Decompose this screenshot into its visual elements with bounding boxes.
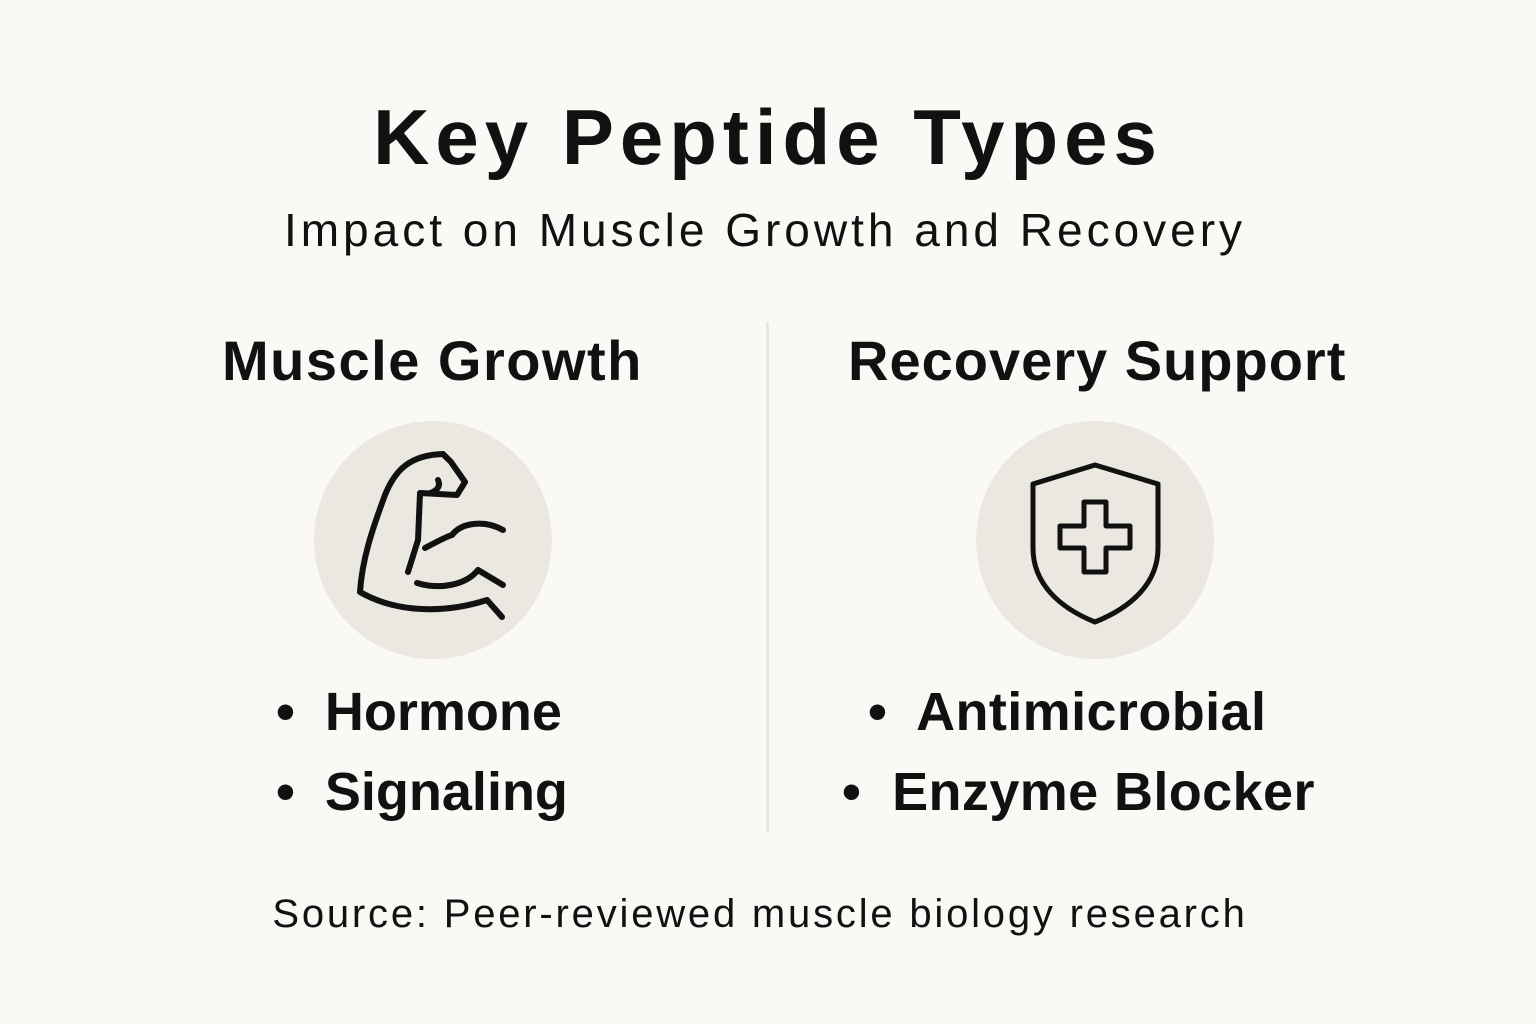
heading: muscle growth: Muscle Growth bbox=[222, 329, 643, 392]
list: muscle growth: • Hormone bbox=[276, 682, 562, 742]
divider bbox=[766, 322, 769, 832]
list: recovery bbox=[842, 682, 1315, 822]
list: recovery: • Antimicrobial bbox=[868, 682, 1266, 742]
list: recovery: • Enzyme Blocker bbox=[842, 762, 1315, 822]
subtitle: Impact on Muscle Growth and Recovery bbox=[284, 204, 1246, 256]
heading: recovery support: Recovery Support bbox=[848, 329, 1346, 392]
source: Source: Peer-reviewed muscle biology research bbox=[272, 892, 1248, 936]
title: Key Peptide Types bbox=[373, 93, 1163, 181]
list: muscle growth: • Signaling bbox=[276, 762, 568, 822]
list: muscle growth bbox=[276, 682, 568, 822]
